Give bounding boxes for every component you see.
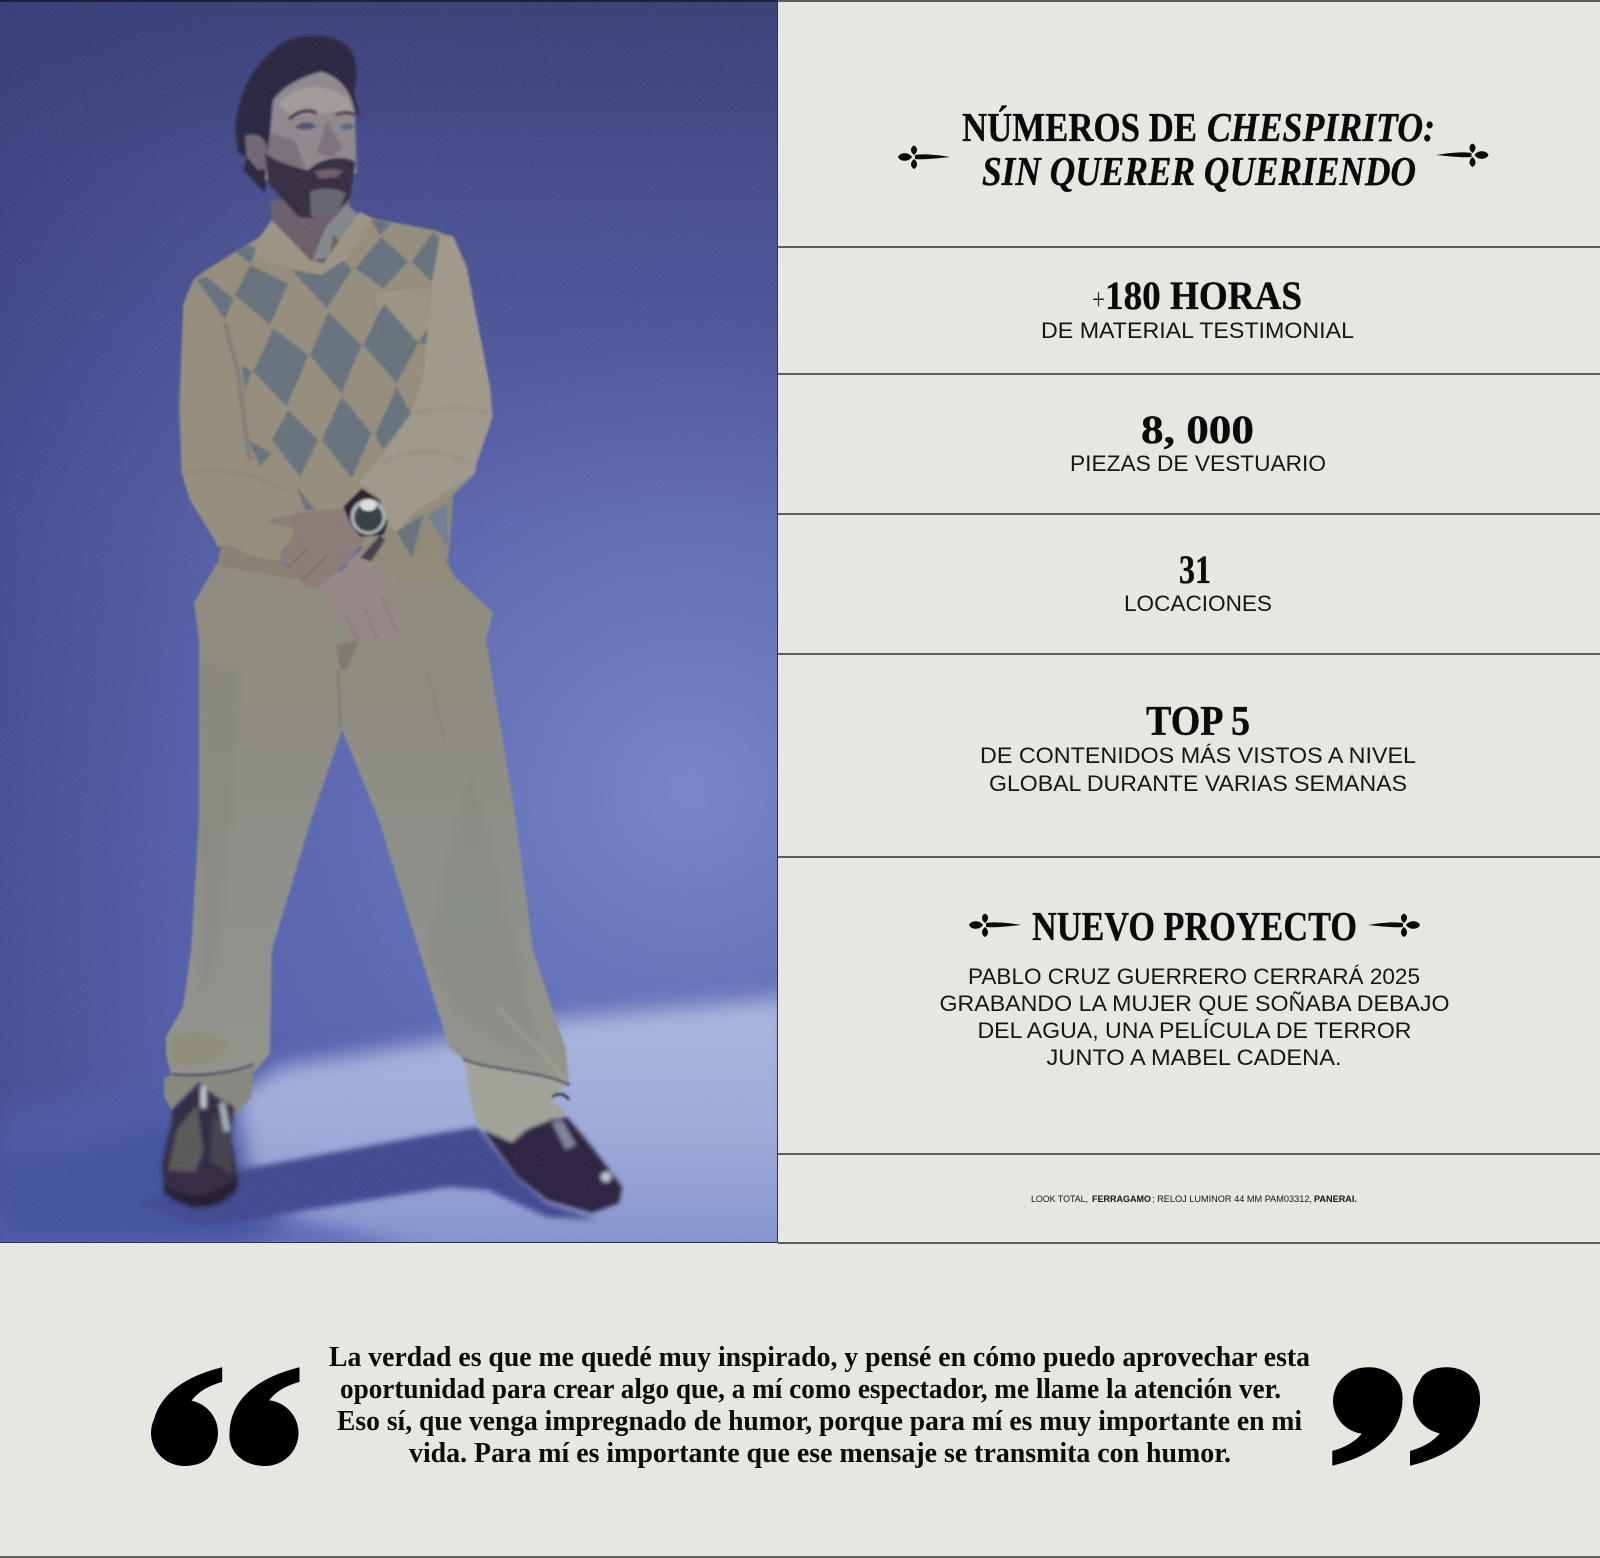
quote text: oportunidad para crear algo que, a mí como espectador, me llame la atención ver.: [340, 1373, 1281, 1405]
stat: 180 horas: +: [1092, 283, 1105, 316]
neck: [270, 199, 351, 264]
stat: 8,000: PIEZAS DE VESTUARIO: [1070, 451, 1326, 476]
stat: 31: LOCACIONES: [1124, 591, 1272, 616]
title line two: SIN QUERER QUERIENDO: [982, 148, 1416, 194]
icon: right ornament: [1436, 144, 1488, 167]
title line one: [962, 104, 1435, 150]
sleeves: [192, 502, 216, 541]
cuffs: [164, 1067, 254, 1117]
stat: 8,000: [1070, 407, 1326, 476]
shirt collar: [313, 204, 361, 261]
project description: PABLO CRUZ GUERRERO CERRARÁ 2025: [968, 964, 1420, 989]
pants: [164, 565, 570, 1143]
project description: GRABANDO LA MUJER QUE SOÑABA DEBAJO: [940, 991, 1450, 1016]
quote text: Eso sí, que venga impregnado de humor, porque para mí es muy importante en mi: [337, 1405, 1302, 1437]
stat: top 5: [980, 699, 1416, 796]
lower sweater: [346, 496, 454, 564]
credits footnote: PANERAI.: [1314, 1194, 1357, 1205]
shoes: [162, 1083, 622, 1213]
quote text: La verdad es que me quedé muy inspirado, y pensé en cómo puedo aprovechar esta: [329, 1341, 1310, 1373]
bottom rule: [0, 1556, 1600, 1558]
title line one: NÚMEROS DE: [962, 104, 1197, 150]
icon: left ornament: [898, 146, 950, 169]
row dividers: [778, 0, 1600, 1244]
credits footnote: LOOK TOTAL,: [1031, 1194, 1088, 1205]
sweater and hands: [179, 200, 493, 643]
stat: top 5: GLOBAL DURANTE VARIAS SEMANAS: [989, 771, 1407, 796]
stat: top 5: DE CONTENIDOS MÁS VISTOS A NIVEL: [980, 743, 1416, 768]
title block: [898, 104, 1488, 194]
stat: top 5: TOP 5: [1146, 699, 1250, 745]
project description: DEL AGUA, UNA PELÍCULA DE TERROR: [978, 1018, 1412, 1043]
photo: man in argyle sweater on blue backdrop: [0, 0, 800, 1255]
stat: 180 horas: DE MATERIAL TESTIMONIAL: [1041, 318, 1354, 343]
icon: left ornament: [969, 914, 1021, 937]
title line one: CHESPIRITO:: [1207, 104, 1435, 150]
quote text: vida. Para mí es importante que ese mensaje se transmita con humor.: [409, 1437, 1231, 1469]
argyle diamonds: [235, 218, 441, 510]
stat: 31: 31: [1179, 547, 1211, 592]
head: [235, 36, 360, 218]
project description: [940, 964, 1450, 1070]
icon: right ornament: [1368, 914, 1420, 937]
hand: upper: [268, 508, 368, 587]
stat: 180 horas: [1041, 273, 1354, 343]
credits footnote: FERRAGAMO: [1092, 1194, 1151, 1205]
credits footnote: [1031, 1194, 1357, 1205]
quote text: [329, 1341, 1310, 1469]
panel: stats column: [778, 0, 1600, 1244]
stat: 8,000: 8, 000: [1141, 407, 1254, 452]
credits footnote: ; RELOJ LUMINOR 44 MM PAM03312,: [1152, 1194, 1312, 1205]
stat: 180 horas: 180 HORAS: [1105, 273, 1302, 318]
new project block: [940, 903, 1450, 1070]
project description: JUNTO A MABEL CADENA.: [1046, 1045, 1342, 1070]
film grain: [0, 0, 778, 1243]
collar band: [253, 212, 372, 274]
pocket: [373, 287, 430, 343]
watch: [343, 488, 388, 537]
sweater body: [179, 212, 493, 547]
hand: lower: [340, 557, 388, 643]
stat: 31: [1124, 547, 1272, 616]
heading: NUEVO PROYECTO: [1032, 903, 1357, 949]
